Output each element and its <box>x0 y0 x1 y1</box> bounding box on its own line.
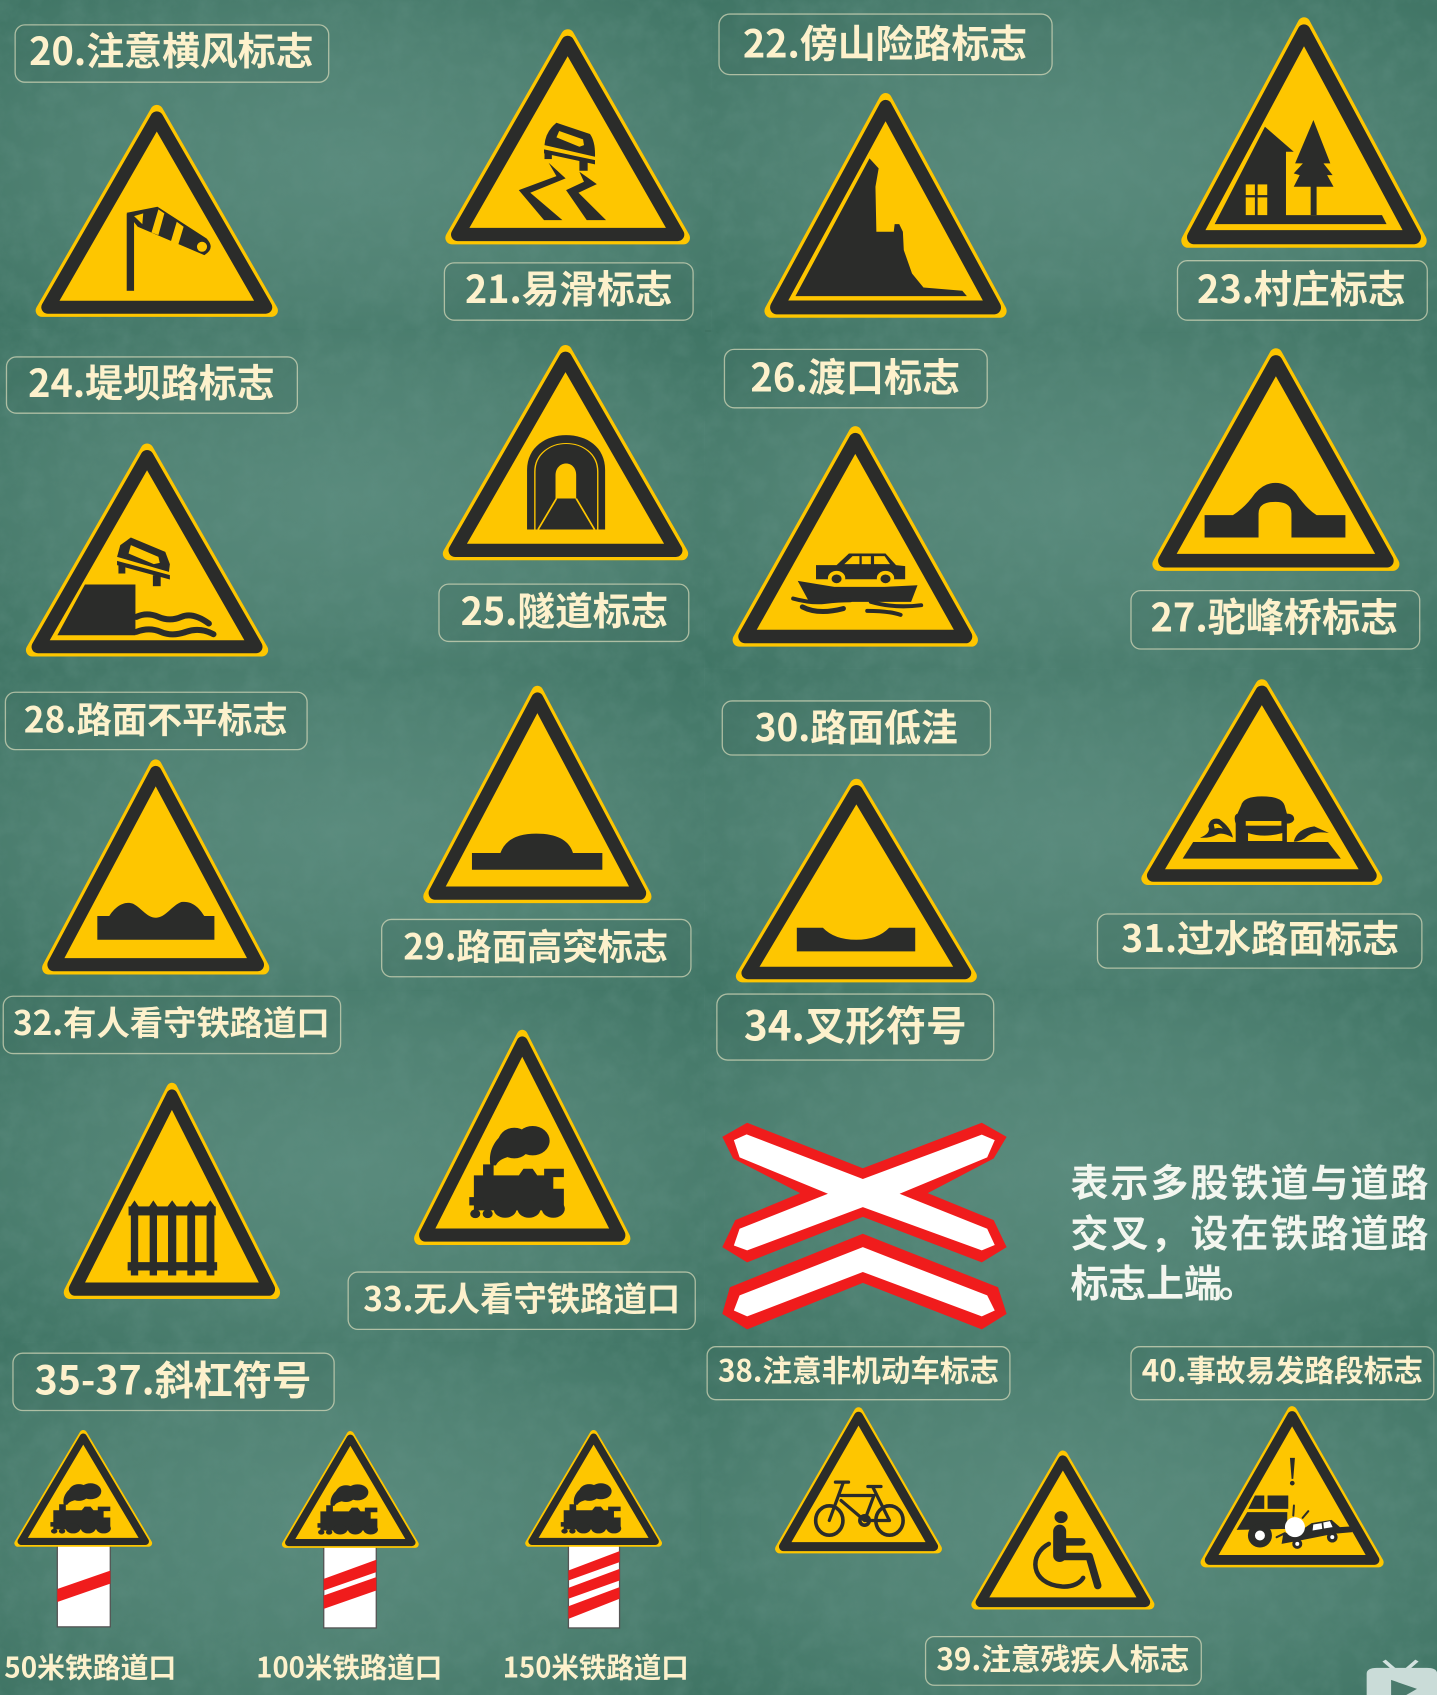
sign 26: ferry <box>739 433 971 640</box>
post <box>568 1546 620 1628</box>
heading: 38: 38.注意非机动车标志 <box>718 1346 999 1390</box>
sign 33: unguarded railway crossing <box>420 1036 625 1238</box>
sign 31: water crossing <box>1148 686 1376 879</box>
post <box>324 1546 376 1628</box>
sign 24: embankment road <box>32 450 262 650</box>
panel: signs 35-37 <box>0 1342 701 1695</box>
sign 32: guarded railway crossing <box>70 1089 274 1292</box>
panel: signs 24-25 <box>0 330 705 670</box>
sign 21: slippery road <box>452 36 683 238</box>
heading: 29: 29.路面高突标志 <box>403 919 668 970</box>
sign 39: disabled persons <box>976 1455 1150 1605</box>
panel: signs 32-33 <box>0 991 705 1342</box>
caption: 100m crossing: 100米铁路道口 <box>256 1646 442 1687</box>
heading: 31: 31.过水路面标志 <box>1121 908 1399 963</box>
heading: 23: 23.村庄标志 <box>1197 259 1406 315</box>
sign 20: crosswind <box>42 111 271 310</box>
heading: 39: 39.注意残疾人标志 <box>936 1635 1189 1679</box>
panel: signs 20-21 <box>0 0 711 330</box>
text: description <box>1070 1152 1429 1308</box>
sign 30: dip <box>742 785 970 976</box>
heading: 20: 20.注意横风标志 <box>29 21 314 77</box>
caption: 50m crossing: 50米铁路道口 <box>4 1646 176 1687</box>
post <box>57 1546 110 1627</box>
panel: signs 28-29 <box>0 670 705 991</box>
sign 29: road hump <box>429 692 645 896</box>
heading: 21: 21.易滑标志 <box>465 259 673 315</box>
caption: 150m crossing: 150米铁路道口 <box>503 1646 689 1687</box>
sign 36: 100m <box>286 1435 415 1628</box>
heading: 30: 30.路面低洼 <box>755 697 958 752</box>
heading: 40: 40.事故易发路段标志 <box>1142 1346 1423 1390</box>
heading: 22: 22.傍山险路标志 <box>743 13 1027 69</box>
sign 37: 150m <box>529 1434 658 1628</box>
sign 22: mountain road <box>771 100 1000 311</box>
sign 28: uneven road <box>48 766 263 968</box>
sign 25: tunnel <box>449 352 682 554</box>
heading: 28: 28.路面不平标志 <box>24 692 288 743</box>
icon: crossbuck <box>722 1123 1007 1329</box>
panel: signs 38-40 <box>701 1342 1437 1695</box>
text: description: 表示多股铁道与道路 <box>1070 1152 1429 1207</box>
panel: signs 22-23 <box>711 0 1437 332</box>
panel: sign 34 <box>705 990 1437 1342</box>
heading: 34: 34.叉形符号 <box>744 993 967 1053</box>
icon: video watermark <box>1367 1661 1437 1695</box>
sign 23: village <box>1188 24 1420 241</box>
heading: 27: 27.驼峰桥标志 <box>1150 588 1398 644</box>
sign 40: accident-prone section <box>1205 1411 1379 1562</box>
panel: signs 30-31 <box>705 668 1437 990</box>
text: description: 。 <box>1219 1253 1256 1308</box>
heading: 24: 24.堤坝路标志 <box>28 353 275 409</box>
heading: 25: 25.隧道标志 <box>461 581 668 637</box>
heading: 26: 26.渡口标志 <box>750 348 960 404</box>
text: description: 交叉，设在铁路道路 <box>1070 1203 1429 1258</box>
sign 35: 50m <box>18 1434 148 1627</box>
text: description: 标志上端 <box>1070 1253 1222 1308</box>
heading: 32: 32.有人看守铁路道口 <box>13 996 330 1045</box>
heading: 33: 33.无人看守铁路道口 <box>363 1272 680 1321</box>
sign 38: bicycles <box>780 1412 937 1549</box>
sign 27: humpback bridge <box>1159 355 1393 564</box>
heading: 35-37: 35-37.斜杠符号 <box>35 1348 311 1406</box>
panel: signs 26-27 <box>705 332 1437 668</box>
